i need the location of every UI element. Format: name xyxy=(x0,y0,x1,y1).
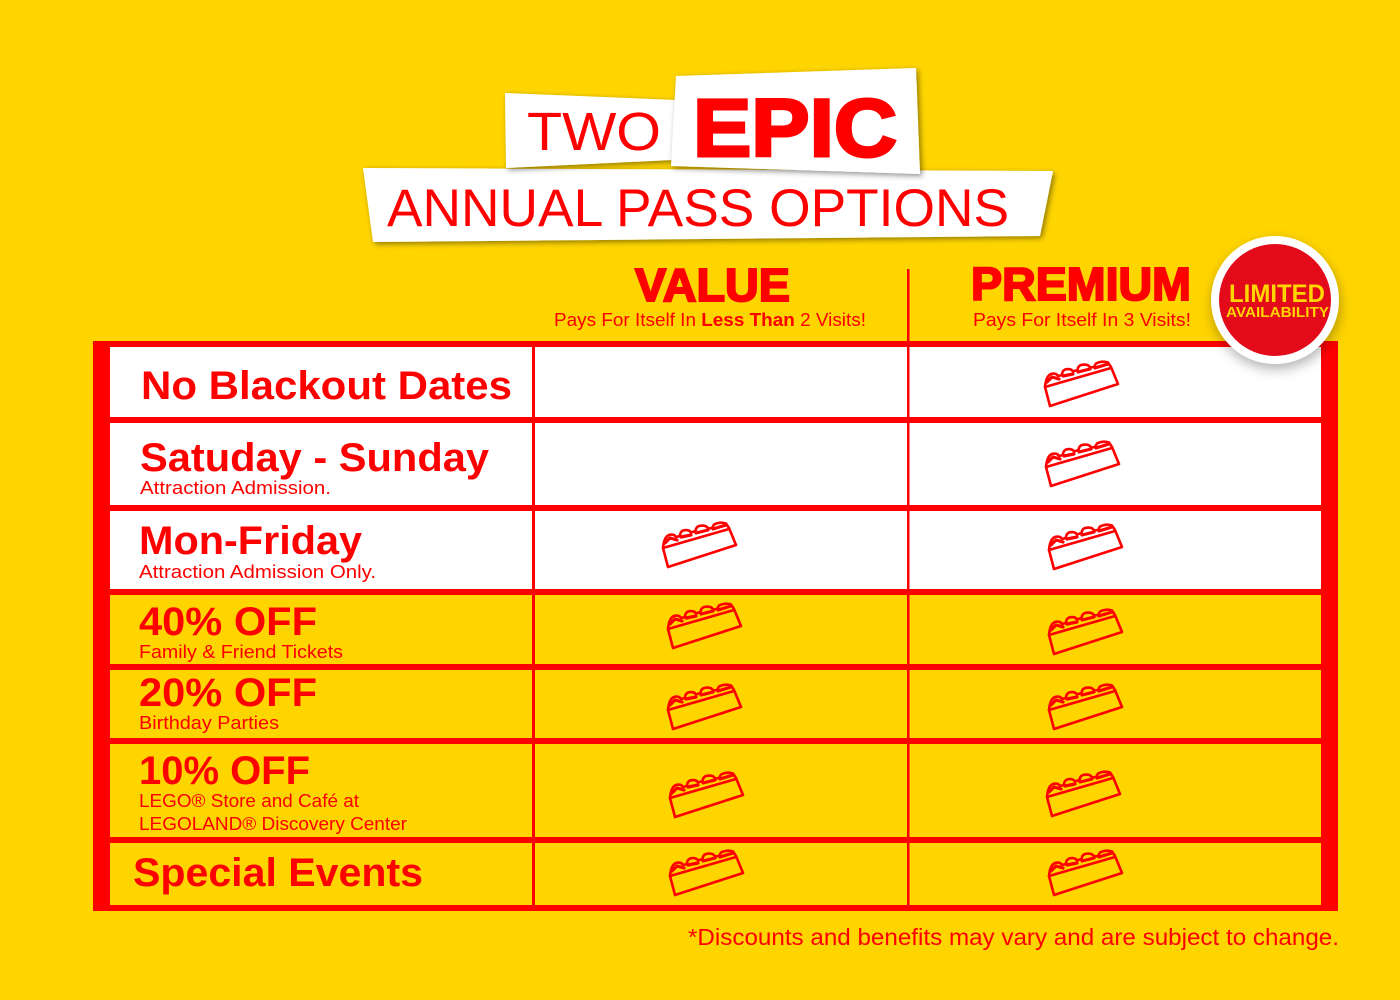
icon: brick value 20% off xyxy=(668,685,741,729)
title banner: annual pass options: ANNUAL PASS OPTIONS xyxy=(387,179,1009,238)
icon: brick premium 20% off xyxy=(1049,685,1122,729)
row label: mon-friday: Attraction Admission Only. xyxy=(139,562,376,582)
row label: 10% off: LEGO® Store and Café at xyxy=(139,791,359,811)
column header: premium: PREMIUM xyxy=(971,258,1191,310)
column header: value xyxy=(554,259,866,330)
icon: brick premium saturday sunday xyxy=(1046,442,1119,486)
icon: brick premium 40% off xyxy=(1049,610,1122,654)
icon: brick value 10% off xyxy=(670,773,743,817)
title tag: epic: EPIC xyxy=(693,83,897,174)
icon: brick premium special events xyxy=(1049,851,1122,895)
row backgrounds xyxy=(110,347,1321,905)
footnote: *Discounts and benefits may vary and are subject to change. xyxy=(688,924,1339,950)
row label: mon-friday xyxy=(139,519,376,582)
row label: saturday - sunday: Attraction Admission. xyxy=(140,478,331,498)
title tag: two: TWO xyxy=(527,102,661,162)
row label: 40% off xyxy=(139,600,343,662)
row label: 10% off xyxy=(139,749,407,834)
icon: brick value 40% off xyxy=(668,604,741,648)
row label: 40% off: 40% OFF xyxy=(139,600,317,644)
comparison table xyxy=(93,341,1338,911)
row label: mon-friday: Mon-Friday xyxy=(139,519,363,563)
row label: 20% off xyxy=(139,671,317,733)
row label: saturday - sunday: Satuday - Sunday xyxy=(140,436,490,480)
badge: limited availability xyxy=(1211,236,1339,364)
row label: saturday - sunday xyxy=(140,436,490,498)
title tag: two xyxy=(505,93,676,168)
icon: brick premium no blackout dates xyxy=(1045,362,1118,406)
icon: brick premium 10% off xyxy=(1047,772,1120,816)
row label: 20% off: 20% OFF xyxy=(139,671,317,715)
column header: premium: Pays For Itself In 3 Visits! xyxy=(973,310,1191,330)
row label: no blackout dates: No Blackout Dates xyxy=(141,364,512,408)
column header: value: Pays For Itself In Less Than 2 Visits! xyxy=(554,310,866,330)
title tag: epic xyxy=(671,68,920,174)
title xyxy=(363,68,1053,242)
row label: 10% off: 10% OFF xyxy=(139,749,310,793)
row label: 10% off: LEGOLAND® Discovery Center xyxy=(139,814,407,834)
column header: value: VALUE xyxy=(635,259,790,311)
icon: brick premium mon-friday xyxy=(1049,525,1122,569)
row label: 20% off: Birthday Parties xyxy=(139,713,279,733)
row label: 40% off: Family & Friend Tickets xyxy=(139,642,343,662)
icon: brick value mon-friday xyxy=(663,523,736,567)
row label: special events: Special Events xyxy=(133,851,423,895)
badge: limited availability: LIMITED xyxy=(1229,280,1325,308)
badge: limited availability: AVAILABILITY xyxy=(1226,304,1329,321)
icon: brick value special events xyxy=(670,851,743,895)
